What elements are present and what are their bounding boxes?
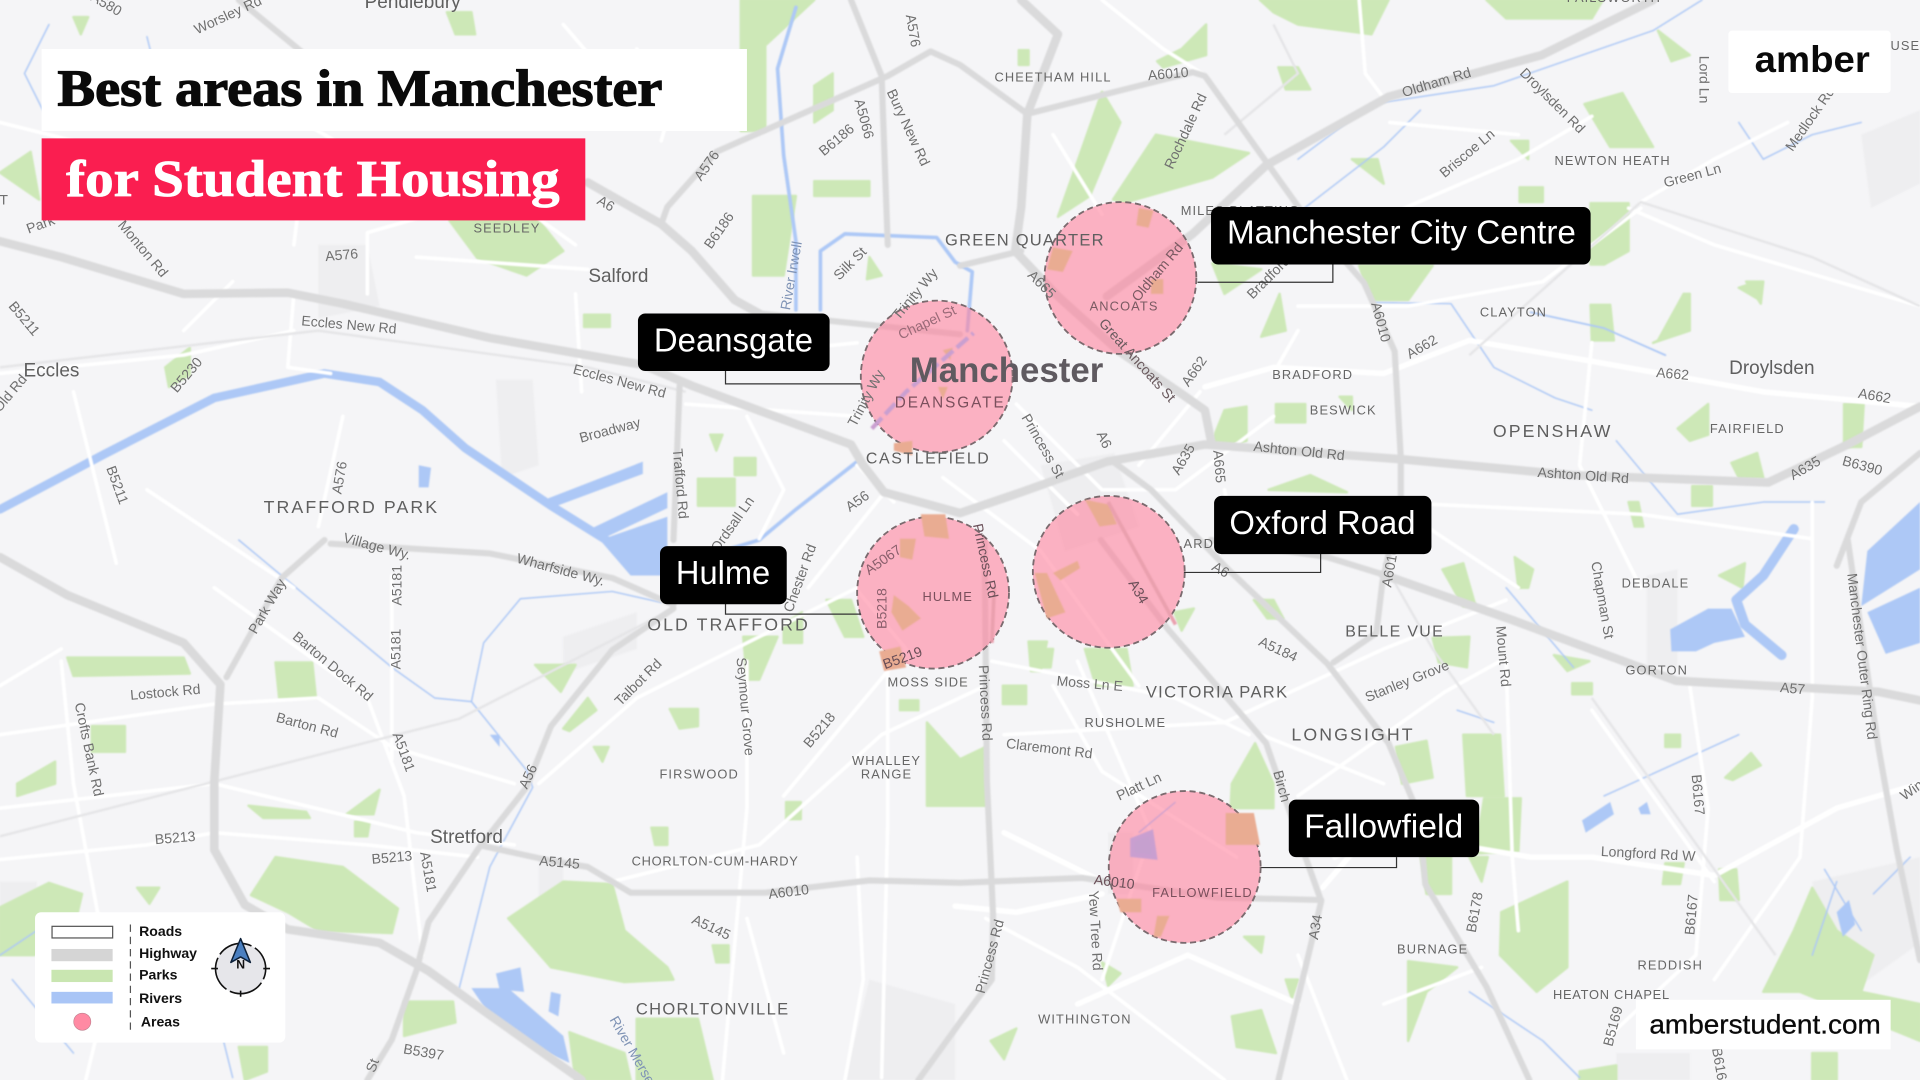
map place and road labels: Chapel St bbox=[896, 302, 958, 342]
map place and road labels: Claremont Rd bbox=[1005, 735, 1093, 761]
map place and road labels: USE bbox=[1890, 38, 1920, 53]
map place and road labels: Princess Rd bbox=[970, 522, 1001, 600]
map place and road labels: A662 bbox=[1403, 331, 1440, 362]
map place and road labels: Princess Rd bbox=[976, 665, 996, 741]
map place and road labels: A576 bbox=[903, 13, 924, 48]
map place and road labels: A5066 bbox=[851, 97, 878, 141]
map place and road labels: GREEN QUARTER bbox=[945, 231, 1105, 250]
map place and road labels: MILES PLATTING bbox=[1181, 203, 1300, 218]
map place and road labels: B6186 bbox=[701, 209, 737, 251]
map place and road labels: B5218 bbox=[800, 709, 839, 751]
map place and road labels: B5213 bbox=[371, 847, 413, 867]
map place and road labels: WITHINGTON bbox=[1038, 1011, 1132, 1026]
map place and road labels: Rochdale Rd bbox=[1161, 91, 1210, 171]
map place and road labels: B6178 bbox=[1463, 891, 1486, 934]
map place and road labels: B5218 bbox=[874, 588, 890, 629]
map place and road labels: Briscoe Ln bbox=[1436, 126, 1498, 181]
area: Manchester City Centre bbox=[1044, 202, 1196, 354]
map place and road labels: A5184 bbox=[1257, 633, 1300, 665]
map place and road labels: Silk St bbox=[830, 243, 870, 283]
map place and road labels: B5211 bbox=[103, 464, 132, 506]
map place and road labels: HEATON CHAPEL bbox=[1553, 987, 1670, 1002]
map place and road labels: LONGSIGHT bbox=[1291, 725, 1415, 745]
map place and road labels: DEANSGATE bbox=[895, 394, 1006, 411]
area circles bbox=[857, 202, 1261, 943]
map place and road labels: A665 bbox=[1025, 267, 1059, 301]
map place and road labels: A5145 bbox=[690, 911, 733, 943]
website label: amberstudent.com bbox=[1649, 1009, 1881, 1039]
map place and road labels: Stanley Grove bbox=[1363, 657, 1451, 705]
map place and road labels: A34 bbox=[1305, 913, 1325, 941]
callout: Manchester City Centre bbox=[1198, 207, 1591, 282]
legend swatch: parks bbox=[51, 970, 113, 982]
map place and road labels: Bradford Rd bbox=[1243, 237, 1308, 302]
callout: Manchester City Centre: Manchester City Centre bbox=[1227, 215, 1576, 252]
map place and road labels: Lostock Rd bbox=[130, 681, 201, 703]
map place and road labels: Lord Ln bbox=[1696, 56, 1712, 103]
map place and road labels: NEWTON HEATH bbox=[1555, 153, 1671, 168]
map place and road labels: Monton Rd bbox=[115, 217, 172, 280]
map place and road labels: Longford Rd W bbox=[1600, 843, 1697, 864]
map place and road labels: OLD TRAFFORD bbox=[647, 614, 810, 634]
map place and road labels: Birch bbox=[1270, 769, 1294, 804]
map place and road labels: B5230 bbox=[167, 354, 205, 395]
callout: Hulme bbox=[660, 546, 861, 614]
map place and road labels: A6010 bbox=[767, 881, 810, 902]
map place and road labels: CHORLTONVILLE bbox=[636, 999, 789, 1018]
map place and road labels: Ashton Old Rd bbox=[1253, 438, 1346, 463]
website label bbox=[1636, 1000, 1891, 1049]
map place and road labels: Yew Tree Rd bbox=[1086, 890, 1106, 971]
map place and road labels: Trafford Rd bbox=[670, 448, 692, 519]
map place and road labels: A57 bbox=[1779, 679, 1806, 697]
map place and road labels: A6010 bbox=[1147, 64, 1189, 83]
callout: Deansgate: Deansgate bbox=[654, 322, 813, 359]
subtitle banner bbox=[42, 138, 585, 220]
map place and road labels: Park bbox=[24, 211, 58, 237]
map place and road labels: A576 bbox=[328, 460, 350, 495]
docks and lakes bbox=[419, 462, 1920, 1063]
map place and road labels: A665 bbox=[1210, 449, 1229, 484]
map place and road labels: Manchester Outer Ring Rd bbox=[1844, 572, 1881, 740]
map place and road labels: Salford bbox=[588, 266, 648, 287]
map place and road labels: Medlock Rd bbox=[1782, 84, 1838, 154]
map place and road labels: Seymour Grove bbox=[733, 657, 758, 756]
map place and road labels: Green Ln bbox=[1662, 160, 1723, 190]
map place and road labels: GORTON bbox=[1625, 662, 1688, 677]
map place and road labels: A56 bbox=[842, 487, 872, 515]
map place and road labels: FAIRFIELD bbox=[1710, 421, 1785, 436]
callout: Hulme: Hulme bbox=[676, 555, 770, 592]
callout: Fallowfield bbox=[1261, 800, 1479, 868]
amber logo bbox=[1728, 31, 1891, 93]
map place and road labels: B5213 bbox=[154, 828, 196, 847]
map place and road labels: Barton Dock Rd bbox=[290, 628, 376, 704]
legend labels: Areas bbox=[141, 1014, 180, 1030]
map place and road labels: Manchester bbox=[910, 350, 1103, 390]
map place and road labels: OPENSHAW bbox=[1493, 421, 1612, 441]
map place and road labels: B5397 bbox=[402, 1040, 445, 1063]
icon: compass: N bbox=[236, 958, 245, 972]
callout: Oxford Road bbox=[1184, 496, 1431, 572]
area: Hulme bbox=[857, 517, 1009, 669]
legend labels: Parks bbox=[139, 967, 178, 983]
map place and road labels: Park Way bbox=[245, 575, 289, 636]
legend swatch: highway bbox=[51, 949, 113, 961]
map place and road labels: Ordsall Ln bbox=[707, 493, 757, 555]
map place and road labels: Oldham Rd bbox=[1128, 239, 1186, 304]
map place and road labels: A5181 bbox=[390, 730, 419, 774]
map place and road labels: B5211 bbox=[6, 298, 43, 339]
map place and road labels: A662 bbox=[1178, 353, 1210, 389]
map place and road labels: A576 bbox=[691, 147, 723, 183]
map place and road labels: ARD bbox=[1184, 536, 1214, 551]
area: Oxford Road bbox=[1033, 496, 1185, 648]
map place and road labels: A34 bbox=[1126, 577, 1152, 606]
map place and road labels: VICTORIA PARK bbox=[1146, 682, 1288, 701]
legend panel bbox=[35, 912, 285, 1043]
map place and road labels: A56 bbox=[515, 761, 540, 791]
map place and road labels: A6 bbox=[1209, 558, 1232, 581]
map place and road labels: CHORLTON-CUM-HARDY bbox=[632, 853, 799, 868]
map place and road labels: Eccles bbox=[23, 361, 79, 382]
legend labels: Highway bbox=[139, 945, 197, 961]
area: Deansgate bbox=[861, 301, 1013, 452]
map place and road labels: Broadway bbox=[577, 414, 643, 446]
callout: Oxford Road: Oxford Road bbox=[1229, 505, 1416, 542]
map place and road labels: A576 bbox=[325, 245, 359, 264]
map place and road labels: A635 bbox=[1168, 441, 1198, 477]
details inside circles bbox=[872, 208, 1260, 937]
map place and road labels: WHALLEY bbox=[852, 753, 921, 768]
map place and road labels: RUSHOLME bbox=[1085, 715, 1166, 730]
map place and road labels: Platt Ln bbox=[1114, 769, 1164, 803]
map place and road labels: Stretford bbox=[430, 827, 503, 848]
map place and road labels: A6010 bbox=[1378, 545, 1401, 588]
map place and road labels: B5169 bbox=[1600, 1004, 1626, 1048]
map place and road labels: RANGE bbox=[861, 766, 912, 781]
map place and road labels: Moss Ln E bbox=[1056, 672, 1124, 694]
map place and road labels: SEEDLEY bbox=[473, 220, 540, 235]
map place and road labels: A5181 bbox=[388, 628, 404, 669]
callout: Fallowfield: Fallowfield bbox=[1304, 809, 1463, 846]
map place and road labels: Wharfside Wy. bbox=[515, 550, 607, 589]
icon: compass bbox=[211, 939, 270, 997]
map place and road labels: Oldham Rd bbox=[1400, 64, 1473, 100]
map place and road labels: A662 bbox=[1857, 385, 1892, 406]
map place and road labels: Ashton Old Rd bbox=[1537, 464, 1629, 486]
map place and road labels: FIRSWOOD bbox=[659, 766, 739, 781]
map place and road labels: Princess Rd bbox=[972, 918, 1007, 995]
map place and road labels: Eccles New Rd bbox=[571, 361, 668, 401]
map place and road labels: Droylsden Rd bbox=[1517, 65, 1588, 136]
map place and road labels: Barton Rd bbox=[275, 709, 340, 741]
map place and road labels: Crofts Bank Rd bbox=[72, 701, 107, 798]
map place and road labels: BRADFORD bbox=[1272, 367, 1353, 382]
map place and road labels: A6010 bbox=[1093, 871, 1136, 892]
map place and road labels: TRAFFORD PARK bbox=[264, 497, 439, 517]
map place and road labels: A6010 bbox=[1368, 300, 1394, 344]
map place and road labels: A5181 bbox=[389, 565, 405, 606]
map place and road labels: A635 bbox=[1787, 453, 1823, 483]
map place and road labels: Chapman St bbox=[1588, 560, 1618, 640]
map place and road labels: FALLOWFIELD bbox=[1152, 885, 1253, 900]
map place and road labels: ANCOATS bbox=[1090, 299, 1159, 314]
map place and road labels: Mount Rd bbox=[1493, 625, 1514, 687]
map place and road labels: River Irwell bbox=[777, 240, 805, 311]
title panel: Best areas in Manchester bbox=[58, 60, 662, 117]
map place and road labels: A5145 bbox=[539, 852, 581, 872]
area: Fallowfield bbox=[1109, 791, 1261, 943]
legend labels: Rivers bbox=[139, 990, 182, 1006]
map place and road labels: Great Ancoats St bbox=[1096, 315, 1179, 405]
map place and road labels: BESWICK bbox=[1310, 403, 1377, 418]
map place and road labels: A6 bbox=[595, 192, 618, 215]
map place and road labels: CASTLEFIELD bbox=[866, 451, 990, 468]
map place and road labels: Princess St bbox=[1019, 411, 1068, 481]
map place and road labels: Village Wy. bbox=[342, 529, 413, 563]
map place and road labels: B6186 bbox=[816, 120, 857, 159]
map place and road labels: DEBDALE bbox=[1622, 575, 1689, 590]
legend labels bbox=[139, 923, 197, 1030]
map place and road labels: Trinity Wy bbox=[889, 264, 941, 323]
map place and road labels: A662 bbox=[1656, 364, 1690, 383]
map place and road labels: Trinity Wy bbox=[844, 366, 888, 429]
map place and road labels: CLAYTON bbox=[1480, 305, 1547, 320]
legend swatch: rivers bbox=[51, 992, 113, 1003]
map place and road labels: Droylsden bbox=[1729, 358, 1815, 379]
subtitle banner: for Student Housing bbox=[66, 151, 560, 208]
map place and road labels: REDDISH bbox=[1637, 957, 1703, 972]
map place and road labels: Talbot Rd bbox=[611, 655, 665, 709]
legend swatch: areas bbox=[74, 1013, 91, 1030]
legend labels: Roads bbox=[139, 923, 182, 939]
map place and road labels: B5219 bbox=[881, 643, 924, 672]
map place and road labels: B6390 bbox=[1841, 452, 1884, 478]
amber logo: amber bbox=[1755, 39, 1870, 80]
map place and road labels: St bbox=[362, 1056, 382, 1074]
legend swatch: roads bbox=[52, 926, 113, 938]
map place and road labels: BURNAGE bbox=[1397, 941, 1468, 956]
title panel bbox=[42, 49, 747, 131]
map place and road labels: Chester Rd bbox=[780, 542, 819, 614]
map place and road labels: BELLE VUE bbox=[1345, 623, 1444, 640]
map place and road labels: Eccles New Rd bbox=[301, 312, 397, 337]
map place and road labels: HULME bbox=[923, 589, 973, 604]
map place and road labels: A5181 bbox=[417, 850, 440, 893]
map place and road labels: A5067 bbox=[862, 541, 904, 578]
map place and road labels: B6167 bbox=[1689, 774, 1708, 816]
map place and road labels: Bury New Rd bbox=[884, 86, 933, 168]
callout: Deansgate bbox=[638, 313, 861, 384]
map place and road labels: MOSS SIDE bbox=[888, 675, 969, 690]
map place and road labels: B6167 bbox=[1681, 894, 1701, 936]
map place and road labels: A6 bbox=[1094, 428, 1115, 451]
map place and road labels: CHEETHAM HILL bbox=[995, 70, 1112, 85]
